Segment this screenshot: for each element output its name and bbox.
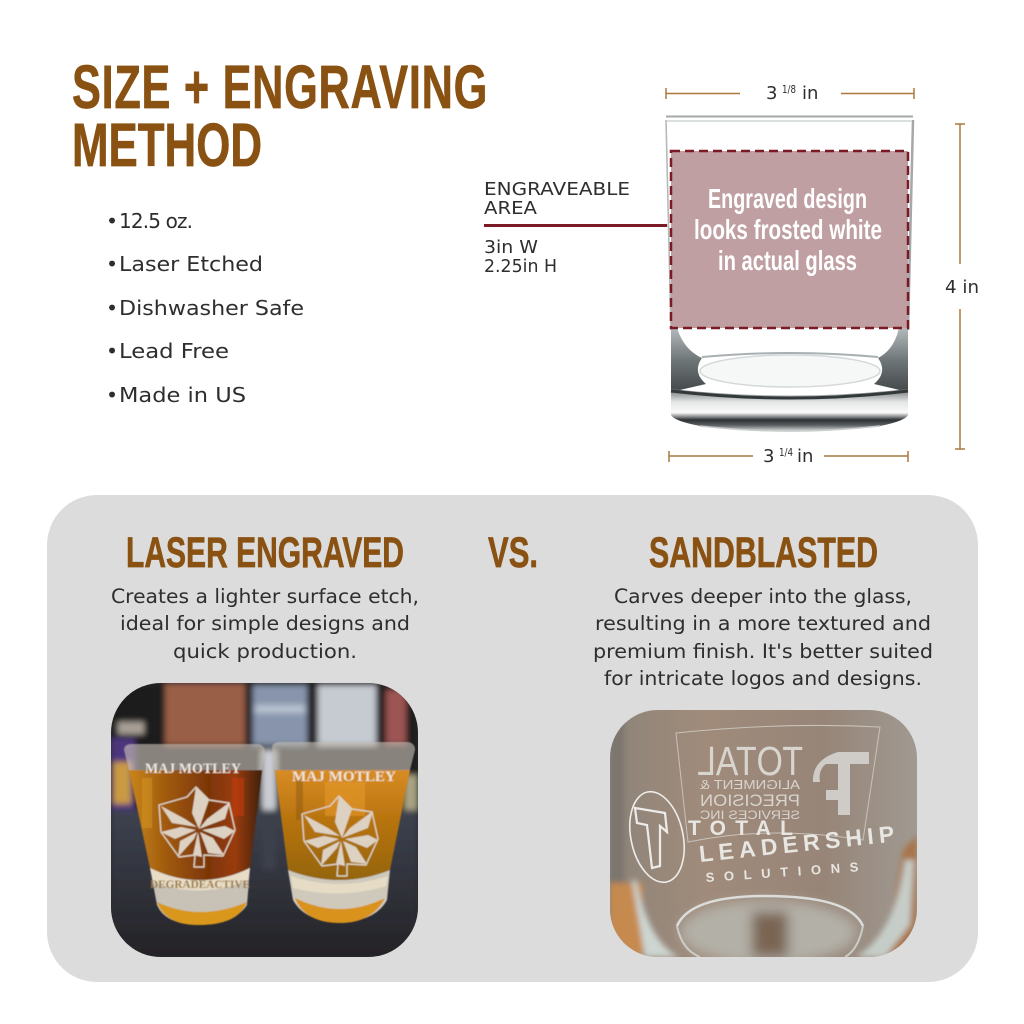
dimension: top width: in (802, 83, 818, 104)
text: laser description (111, 585, 419, 663)
engraved logo text: TOTAL (688, 817, 793, 840)
dimension: bottom width: 1/4 (779, 446, 793, 459)
text: sandblasted description: Carves deeper into the glass, (614, 585, 912, 608)
text: laser description: ideal for simple designs and (120, 612, 410, 635)
feature list: • (106, 296, 118, 320)
dimension: bottom width: 3 (763, 446, 774, 467)
text: laser description: Creates a lighter surface etch, (111, 585, 419, 608)
left shot glass: DEGRADEACTIVE (150, 877, 250, 891)
engraveable area label: 2.25in H (484, 256, 557, 277)
dimension: top width: 3 (766, 83, 777, 104)
engraveable area label (484, 179, 670, 277)
title: SIZE + ENGRAVING (72, 53, 488, 121)
heading: laser engraved: LASER ENGRAVED (126, 529, 404, 577)
dimension: height: 4 in (945, 277, 979, 298)
engraving area (671, 151, 908, 328)
engraved logo text: LEADERSHIP (698, 821, 895, 867)
dimension: top width: 1/8 (782, 83, 796, 96)
dimension: top width (666, 83, 914, 104)
icon: TP logo (813, 752, 869, 815)
feature list: • (106, 252, 118, 276)
left shot glass (124, 744, 265, 925)
dimension: bottom width (669, 446, 908, 467)
feature list: • (106, 339, 118, 363)
feature list: • (106, 209, 118, 233)
text: sandblasted description: resulting in a more textured and (595, 612, 931, 635)
engraveable area label: AREA (484, 198, 538, 219)
feature list (106, 209, 304, 407)
mirrored back-side engraving: SERVICES INC (700, 808, 800, 822)
engraved logo text: SOLUTIONS (705, 859, 859, 885)
photo: sandblasted glass (610, 710, 917, 964)
mirrored back-side engraving: ALIGNMENT & (700, 777, 800, 792)
feature list: Lead Free (119, 339, 229, 363)
mirrored back-side engraving (676, 725, 880, 842)
icon: etched leaves (159, 787, 235, 867)
feature list: • (106, 383, 118, 407)
title (72, 53, 488, 179)
feature list: Laser Etched (119, 252, 263, 276)
left shot glass: MAJ MOTLEY (145, 761, 241, 777)
panel: comparison (47, 495, 978, 982)
glass diagram (665, 115, 914, 432)
lower corners (671, 328, 706, 392)
text: laser description: quick production. (173, 640, 357, 663)
heading: sandblasted: SANDBLASTED (649, 529, 878, 577)
icon: circular T logo (628, 790, 686, 884)
right shot glass: MAJ MOTLEY (292, 769, 396, 785)
title: METHOD (72, 111, 262, 179)
feature list: Dishwasher Safe (119, 296, 304, 320)
mirrored back-side engraving: TOTAL (697, 738, 803, 784)
photo: laser engraved shot glasses (111, 683, 418, 957)
heading: versus: VS. (488, 529, 538, 577)
feature list: 12.5 oz. (119, 209, 193, 233)
engraving area: Engraved design (708, 183, 867, 214)
text: sandblasted description (593, 585, 933, 690)
feature list: Made in US (119, 383, 246, 407)
engraving area: in actual glass (718, 245, 857, 276)
engraveable area label: 3in W (484, 237, 538, 258)
right shot glass (272, 742, 415, 923)
dimension: bottom width: in (797, 446, 813, 467)
engraving area: looks frosted white (694, 214, 882, 245)
text: sandblasted description: for intricate logos and designs. (604, 667, 922, 690)
mirrored back-side engraving: PRECISION (700, 791, 800, 810)
text: sandblasted description: premium finish. It's better suited (593, 640, 933, 663)
engraveable area label: ENGRAVEABLE (484, 179, 630, 200)
dimension: height (945, 124, 979, 449)
